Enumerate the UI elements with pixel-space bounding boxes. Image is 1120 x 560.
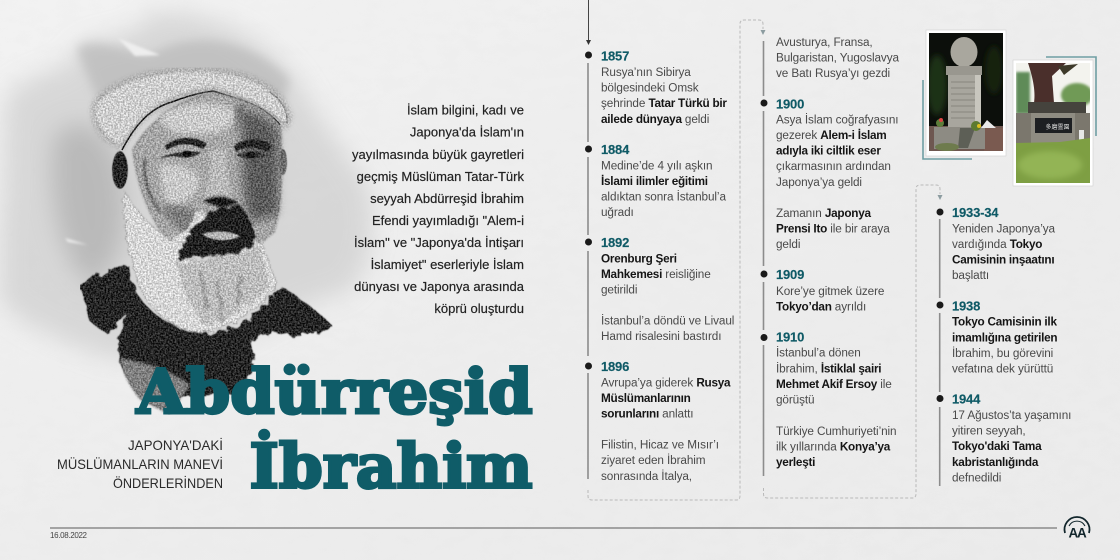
entry 1910: İbrahim, İstiklal şairi	[776, 362, 881, 375]
entry 1900	[776, 96, 898, 251]
intro text block: Japonya'da İslam'ın	[410, 125, 524, 140]
dashed connector to column 2	[588, 20, 766, 500]
start arrow	[586, 0, 591, 45]
entry 1857: ailede dünyaya geldi	[601, 113, 709, 126]
entry 1938: İbrahim, bu görevini	[952, 347, 1053, 360]
entry 1857: 1857	[601, 48, 629, 64]
entry 1884: İslami ilimler eğitimi	[601, 175, 708, 188]
intro text block	[352, 102, 525, 316]
entry 1896: ziyaret eden İbrahim	[601, 454, 706, 467]
intro text block: dünyası ve Japonya arasında	[354, 279, 525, 294]
title: name: Abdürreşid	[135, 357, 533, 428]
entry 1944: defnedildi	[952, 472, 1001, 484]
entry 1884: 1884	[601, 142, 630, 157]
intro text block: İslam" ve "Japonya'da İntişarı	[354, 235, 524, 250]
entry 1933-34	[952, 205, 1056, 282]
continuation text: ve Batı Rusya’yı gezdi	[776, 67, 890, 80]
continuation text: Bulgaristan, Yugoslavya	[776, 52, 899, 65]
entry 1892: Orenburg Şeri	[601, 252, 677, 265]
title: name	[135, 357, 533, 502]
eyebrows and eyes	[160, 138, 272, 159]
entry 1900: Prensi Ito ile bir araya	[776, 222, 890, 235]
entry 1900: çıkarmasının ardından	[776, 160, 891, 173]
photo: Tama cemetery: 多磨霊園	[1045, 122, 1070, 131]
photo: Tama cemetery	[1013, 57, 1096, 186]
entry 1857: Rusya’nın Sibirya	[601, 66, 691, 79]
timeline column 2	[760, 36, 899, 476]
entry 1938: imamlığına getirilen	[952, 331, 1057, 344]
entry 1892	[601, 235, 734, 343]
entry 1944: 17 Ağustos’ta yaşamını	[952, 409, 1071, 422]
moustache and mouth	[178, 205, 254, 260]
entry 1896: Filistin, Hicaz ve Mısır’ı	[601, 438, 719, 451]
date: 16.08.2022	[50, 531, 88, 540]
intro text block: yayılmasında büyük gayretleri	[352, 147, 524, 162]
entry 1910: Türkiye Cumhuriyeti’nin	[776, 425, 896, 438]
turban	[92, 68, 292, 150]
portrait of Abdürreşid İbrahim on watercolor wash	[0, 13, 372, 415]
entry 1857: şehrinde Tatar Türkü bir	[601, 97, 727, 110]
lower lip	[202, 232, 240, 240]
entry 1910: 1910	[776, 329, 804, 344]
connector lines and dots	[760, 41, 768, 476]
entry 1884: Medine’de 4 yılı aşkın	[601, 159, 712, 172]
subtitle: MÜSLÜMANLARIN MANEVİ	[57, 455, 223, 472]
entry 1892: 1892	[601, 235, 629, 250]
logo: AA	[1064, 517, 1090, 540]
timeline column 1	[585, 0, 734, 483]
footer rule	[50, 527, 1057, 529]
entry 1892: getirildi	[601, 283, 637, 296]
subtitle: JAPONYA'DAKİ	[128, 436, 223, 453]
entry 1944: yitiren seyyah,	[952, 425, 1026, 438]
ears	[112, 149, 287, 189]
intro text block: seyyah Abdürreşid İbrahim	[370, 191, 524, 206]
face	[132, 92, 282, 262]
entry 1896: Avrupa’ya giderek Rusya	[601, 377, 731, 390]
entry 1884	[601, 142, 726, 219]
entry 1857: bölgesindeki Omsk	[601, 82, 699, 95]
lower coat fade	[120, 358, 190, 415]
entry 1933-34: vardığında Tokyo	[952, 238, 1042, 251]
entry 1910: görüştü	[776, 394, 814, 406]
title: name: İbrahim	[250, 430, 532, 502]
coat	[80, 264, 333, 395]
entry 1900: geldi	[776, 238, 800, 251]
entry 1909: Kore’ye gitmek üzere	[776, 285, 885, 298]
entry 1910: ilk yıllarında Konya’ya	[776, 440, 891, 454]
entry 1910: Mehmet Akif Ersoy ile	[776, 378, 892, 391]
connector lines and dots	[936, 208, 944, 486]
entry 1857	[601, 48, 727, 126]
intro text block: köprü oluşturdu	[434, 301, 524, 316]
entry 1938: 1938	[952, 298, 980, 313]
timeline column 3	[936, 205, 1071, 486]
entry 1933-34: başlattı	[952, 269, 989, 282]
continuation text	[776, 36, 899, 80]
entry 1933-34: Yeniden Japonya’ya	[952, 222, 1056, 235]
entry 1900: Japonya’ya geldi	[776, 176, 862, 189]
entry 1909	[776, 267, 885, 314]
entry 1910: İstanbul’a dönen	[776, 347, 861, 360]
dashed connector to column 3	[764, 185, 942, 498]
entry 1944: 1944	[952, 392, 981, 407]
beard	[124, 190, 277, 333]
entry 1896: 1896	[601, 359, 629, 374]
entry 1892: Mahkemesi reisliğine	[601, 268, 711, 281]
entry 1944	[952, 392, 1071, 484]
logo: AA: AA	[1068, 526, 1087, 540]
entry 1900: Zamanın Japonya	[776, 207, 871, 220]
entry 1892: İstanbul’a döndü ve Livaul	[601, 314, 734, 327]
entry 1896: Müslümanlarının	[601, 392, 691, 405]
nose	[203, 150, 238, 208]
connector lines and dots	[585, 52, 592, 479]
entry 1933-34: Camisinin inşaatını	[952, 254, 1054, 267]
entry 1900: 1900	[776, 96, 804, 111]
entry 1938: vefatına dek yürüttü	[952, 362, 1053, 376]
entry 1933-34: 1933-34	[952, 205, 999, 220]
entry 1910	[776, 329, 896, 469]
entry 1896: sonrasında İtalya,	[601, 470, 692, 483]
figure with photographic grain	[80, 68, 333, 415]
entry 1896	[601, 359, 731, 483]
intro text block: İslamiyet" eserleriyle İslam	[371, 257, 524, 272]
watercolor wash	[0, 13, 372, 358]
entry 1892: Hamd risalesini bastırdı	[601, 330, 721, 343]
entry 1900: gezerek Alem-i İslam	[776, 129, 887, 142]
continuation text: Avusturya, Fransa,	[776, 36, 873, 49]
photo: grave monument	[923, 30, 1006, 159]
entry 1910: yerleşti	[776, 456, 815, 469]
entry 1884: aldıktan sonra İstanbul’a	[601, 190, 726, 203]
intro text block: Efendi yayımladığı "Alem-i	[372, 213, 524, 228]
entry 1944: Tokyo'daki Tama	[952, 440, 1042, 453]
entry 1938	[952, 298, 1057, 376]
entry 1909: Tokyo’dan ayrıldı	[776, 300, 866, 314]
entry 1896: sorunlarını anlattı	[601, 408, 693, 421]
entry 1900: Asya İslam coğrafyasını	[776, 114, 898, 127]
entry 1909: 1909	[776, 267, 804, 282]
intro text block: İslam bilgini, kadı ve	[407, 102, 524, 118]
entry 1944: kabristanlığında	[952, 456, 1039, 469]
intro text block: geçmiş Müslüman Tatar-Türk	[357, 169, 524, 184]
entry 1884: uğradı	[601, 206, 634, 219]
subtitle: ÖNDERLERİNDEN	[113, 474, 223, 491]
entry 1938: Tokyo Camisinin ilk	[952, 316, 1057, 329]
entry 1900: adıyla iki ciltlik eser	[776, 145, 881, 158]
subtitle	[57, 436, 223, 491]
